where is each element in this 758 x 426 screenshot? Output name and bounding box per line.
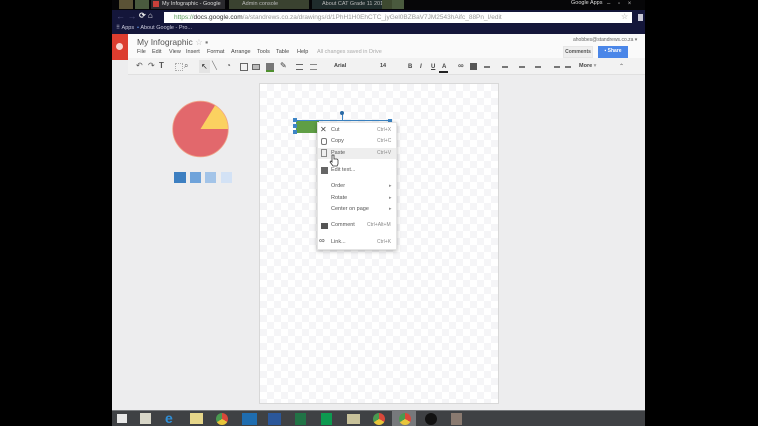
arrow: Order: ▸ — [389, 183, 392, 189]
highlighted row: Paste — [318, 148, 396, 159]
icon: folder — [347, 414, 360, 424]
item: Rotate: Rotate — [331, 195, 347, 201]
icon: line spacing — [502, 66, 508, 68]
window controls: – ▫ × — [607, 1, 631, 7]
account email: ahobbes@standrews.co.za ▾ — [573, 36, 637, 42]
text colour underline — [439, 71, 448, 73]
icon: chrome 1 — [216, 413, 228, 425]
icon: obs — [425, 413, 437, 425]
icon: decrease indent — [554, 66, 560, 68]
italic: I — [420, 64, 422, 70]
menu: Insert: Insert — [186, 49, 200, 55]
icon: outlook — [242, 413, 257, 425]
item: Center on page: Center on page — [331, 206, 369, 212]
item: Copy: Copy — [331, 138, 344, 144]
icon: chrome 3 active — [392, 411, 416, 426]
item: Cut: Cut — [331, 127, 340, 133]
icon: undo: ↶ — [136, 61, 143, 70]
icon: select box — [175, 63, 183, 71]
icon: app — [451, 413, 462, 425]
tab: My Infographic — [151, 0, 225, 9]
context menu — [317, 122, 397, 250]
menu: View: View — [169, 49, 181, 55]
text colour: A — [442, 64, 446, 70]
menu: Tools: Tools — [257, 49, 270, 55]
screen: browser window — [112, 0, 645, 426]
app header — [112, 34, 645, 58]
logo: drawings — [112, 34, 128, 60]
browser navigation bar — [112, 10, 645, 24]
collapse icon: ⌃ — [619, 64, 624, 70]
item: Edit text: Edit text... — [331, 167, 355, 173]
icon: fill colour — [266, 63, 274, 72]
icon: paint format: T — [159, 61, 164, 70]
cursor: hand pointer — [330, 154, 338, 166]
handle: bottom left — [293, 130, 297, 134]
icon: align — [484, 66, 490, 68]
selected green shape — [293, 118, 388, 133]
icon: reload and home: ⟳ ⌂ — [139, 11, 153, 20]
icon: select cursor — [199, 60, 210, 73]
favicon: drawings tab — [153, 1, 159, 7]
toolbar — [128, 58, 645, 75]
tab: pinned mail — [119, 0, 133, 9]
item: Link: Link... — [331, 239, 346, 245]
arrow: Center on page: ▸ — [389, 206, 392, 212]
window label: Google Apps: Google Apps — [571, 0, 602, 6]
tab: pinned drive — [135, 0, 149, 9]
icon: file explorer — [190, 413, 203, 424]
item: Order: Order — [331, 183, 345, 189]
icon: select cursor: ↖ — [201, 62, 208, 71]
icon: windows start — [117, 414, 127, 423]
logo mark — [116, 43, 123, 50]
pie slice: red — [173, 101, 228, 157]
icon: word — [268, 413, 281, 425]
tab: Admin console: Admin console — [242, 1, 278, 7]
menu icon: comment — [321, 223, 328, 229]
icon: line: ╲ — [212, 61, 217, 70]
icon: bookmark star: ☆ — [621, 12, 628, 21]
icon: zoom: ⌕ — [184, 61, 188, 70]
icon: numbered list — [519, 66, 525, 68]
browser tab strip — [112, 0, 645, 10]
swatch 4 — [221, 172, 232, 183]
menu icon: cut: ✕ — [320, 125, 327, 134]
shortcut: Paste: Ctrl+V — [377, 150, 391, 156]
shortcut: Link: Ctrl+K — [377, 239, 391, 245]
menu: Help: Help — [297, 49, 308, 55]
save status: All changes saved in Drive — [317, 49, 382, 55]
menu icon: edit text — [321, 167, 328, 174]
green rectangle — [296, 121, 319, 133]
pie slice: yellow — [200, 106, 228, 129]
document title: My Infographic ☆ ▪ — [137, 37, 208, 47]
handle: rotate — [340, 111, 344, 115]
shortcut: Comment: Ctrl+Alt+M — [367, 222, 391, 228]
icon: internet explorer: e — [165, 410, 173, 426]
icon: increase indent — [565, 66, 571, 68]
icon: line dash — [310, 64, 317, 70]
menu: Edit: Edit — [152, 49, 161, 55]
nav icons: ← → — [116, 11, 137, 21]
icon: redo: ↷ — [148, 61, 155, 70]
chart: pie — [172, 100, 229, 158]
icon: comment — [470, 63, 477, 70]
tab: My Infographic: My Infographic - Google — [162, 1, 221, 7]
icon: image — [252, 64, 260, 70]
share button — [598, 46, 628, 58]
icon: publisher — [321, 413, 332, 425]
tab: extra one — [382, 0, 392, 9]
swatch 2 — [190, 172, 201, 183]
underline: U — [431, 64, 435, 70]
address bar: https://docs.google.com/a/standrews.co.za/drawings/d/1PhH1H0EhCTC_jyGel0BZBaV7JM2543hAifc_88Pn_I/edit — [174, 14, 502, 20]
bold: B — [408, 64, 412, 70]
menu: File: File — [137, 49, 146, 55]
legend swatches — [174, 172, 232, 183]
address bar — [164, 12, 632, 23]
icon: line weight — [296, 64, 303, 70]
selection handle — [293, 118, 297, 122]
icon: link: ∞ — [458, 61, 464, 70]
canvas page — [259, 83, 499, 404]
icon: pen: ✎ — [280, 61, 287, 70]
font selector: Arial — [334, 63, 346, 69]
bookmarks bar — [112, 24, 645, 34]
selection top line — [295, 120, 390, 121]
icon: bullet list — [535, 66, 541, 68]
menu: Arrange: Arrange — [231, 49, 251, 55]
handle: left middle — [293, 124, 297, 128]
menu icon: copy — [321, 138, 327, 145]
icon: shape: ◔ — [226, 61, 231, 70]
handle: rotate stem — [342, 113, 343, 120]
shortcut: Copy: Ctrl+C — [377, 138, 391, 144]
tab: extra two — [392, 0, 404, 9]
menu: Format: Format — [207, 49, 224, 55]
handle: top right — [388, 119, 392, 122]
tab: About CAT — [312, 0, 382, 9]
bookmark labels: ⠿ Apps ▪ About Google - Pro... — [116, 25, 192, 31]
swatch 1 — [174, 172, 186, 183]
menu: Table: Table — [276, 49, 289, 55]
item: Paste: Paste — [331, 150, 345, 156]
menu bar — [137, 49, 308, 55]
tab: Admin console — [229, 0, 309, 9]
shortcut: Cut: Ctrl+X — [377, 127, 391, 133]
icon: chrome 2 — [373, 413, 385, 425]
icon: excel — [295, 413, 306, 425]
font size: 14 — [380, 63, 386, 69]
comments button: Comments — [565, 49, 591, 55]
arrow: Rotate: ▸ — [389, 195, 392, 201]
icon: apps — [140, 413, 151, 424]
taskbar — [112, 410, 645, 426]
item: Comment: Comment — [331, 222, 355, 228]
menu icon: paste — [321, 149, 327, 157]
menu icon: link: ∞ — [319, 236, 325, 245]
share button: ▪ Share — [604, 48, 622, 54]
swatch 3 — [205, 172, 216, 183]
more menu: More ▾ — [579, 63, 596, 69]
comments button — [563, 46, 593, 58]
icon: chrome menu — [638, 14, 643, 21]
icon: text box — [240, 63, 248, 71]
chrome glyph — [399, 413, 411, 425]
